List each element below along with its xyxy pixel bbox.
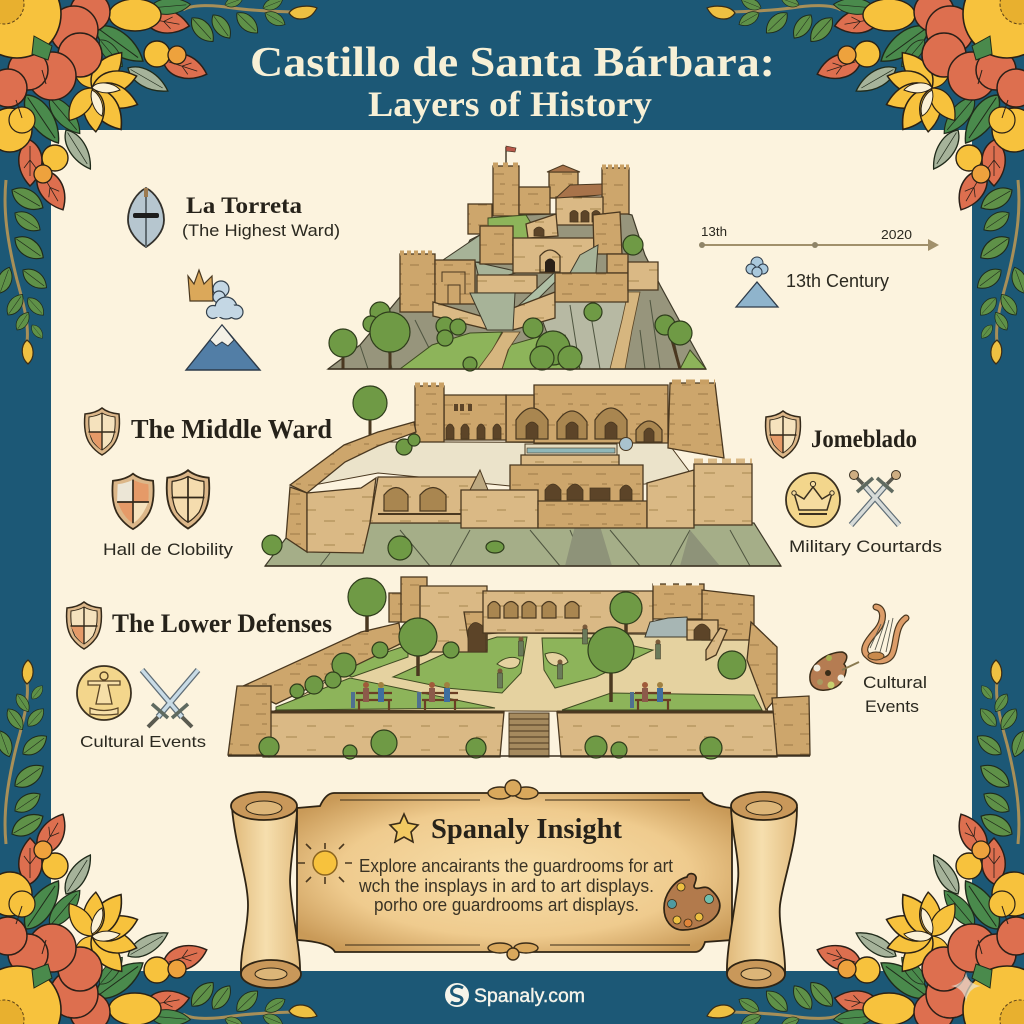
heading: The Lower Defenses: The Lower Defenses [112, 609, 332, 638]
floral corner: bottom right [707, 660, 1024, 1024]
title [250, 40, 775, 124]
heading: The Lower Defenses [67, 602, 332, 649]
label: 13th Century: 13th Century [786, 271, 889, 291]
castle illustration: The Middle Ward [262, 382, 781, 566]
icon: mountain [186, 325, 260, 370]
rocky base [265, 523, 781, 566]
scroll ornaments [488, 780, 538, 960]
outer walls [290, 422, 416, 493]
icons: twin shields [112, 470, 209, 529]
tan ground [276, 633, 768, 712]
trees and bushes [329, 235, 692, 371]
scroll heading: Spanaly Insight [431, 813, 622, 845]
scroll parchment body [297, 793, 732, 952]
icon: knight helmet [128, 188, 164, 247]
timeline: 13th [701, 224, 727, 239]
back walls [534, 385, 668, 443]
back arches [446, 404, 662, 442]
bushes on rock [262, 535, 504, 560]
label: La Torreta: La Torreta [186, 193, 303, 218]
courtyard [314, 442, 692, 486]
scroll body text [358, 855, 673, 915]
right rampart [747, 622, 777, 710]
label: Cultural Events: Cultural Events [80, 734, 206, 751]
label: La Torreta [182, 193, 340, 240]
scroll body text: Explore ancairants the guardrooms for art [359, 855, 673, 876]
icon: paint palette [810, 652, 859, 690]
benches with visitors [351, 682, 671, 710]
watermark sparkle [951, 972, 981, 1002]
timeline [699, 224, 939, 251]
heading: The Middle Ward: The Middle Ward [131, 414, 332, 444]
castle illustration: The Lower Defenses [228, 577, 810, 759]
flag [506, 146, 516, 164]
label: Military Courtards: Military Courtards [789, 537, 942, 556]
icon: lyre [865, 607, 906, 661]
central staircase [509, 713, 549, 757]
panel: scroll insight [231, 780, 797, 988]
back structures [389, 593, 404, 622]
scroll body text: wch the insplays in ard to art displays. [358, 875, 654, 896]
icon: sun [298, 843, 352, 884]
strolling figures [498, 624, 660, 688]
heading: The Middle Ward [85, 408, 332, 455]
heading: Jomeblado: Jomeblado [811, 426, 917, 453]
pool terrace [521, 438, 632, 466]
floral corner: top left [0, 0, 317, 364]
icon: crossed swords [142, 670, 198, 727]
left scroll roller [231, 792, 301, 988]
front bushes [259, 730, 722, 759]
icon: palette [664, 874, 720, 930]
slanted left rampart [241, 623, 402, 704]
floral corner: top right [707, 0, 1024, 364]
floral corner: bottom left [0, 660, 317, 1024]
lower ward trees [290, 578, 746, 702]
timeline: 2020 [881, 227, 912, 242]
right scroll roller [727, 792, 797, 988]
label: La Torreta: (The Highest Ward) [182, 221, 340, 240]
footer logo and website: Spanaly.com [474, 985, 585, 1007]
heading: Jomeblado [766, 411, 917, 458]
icon: crown and cloud [188, 270, 243, 319]
icon: crown medallion [786, 473, 840, 527]
front walls [263, 712, 504, 757]
icon: crossed swords with pommels [850, 470, 900, 525]
cream content panel [51, 130, 972, 971]
title: Castillo de Santa Bárbara: [250, 40, 775, 86]
icon: figure medallion [77, 666, 131, 720]
tree on wall [353, 386, 420, 455]
label: Hall de Clobility: Hall de Clobility [103, 540, 234, 559]
castle illustration: La Torreta upper ward [328, 146, 706, 371]
label: Cultural Events (right) [863, 673, 927, 716]
title: Layers of History [368, 84, 652, 124]
lawns [276, 637, 762, 710]
icon: star [390, 814, 418, 842]
label: Cultural Events (right): Events [865, 697, 919, 716]
label: Cultural Events (right): Cultural [863, 673, 927, 692]
icon: small mountain and cloud [736, 257, 778, 307]
scroll body text: porho ore guardrooms art displays. [374, 894, 639, 915]
